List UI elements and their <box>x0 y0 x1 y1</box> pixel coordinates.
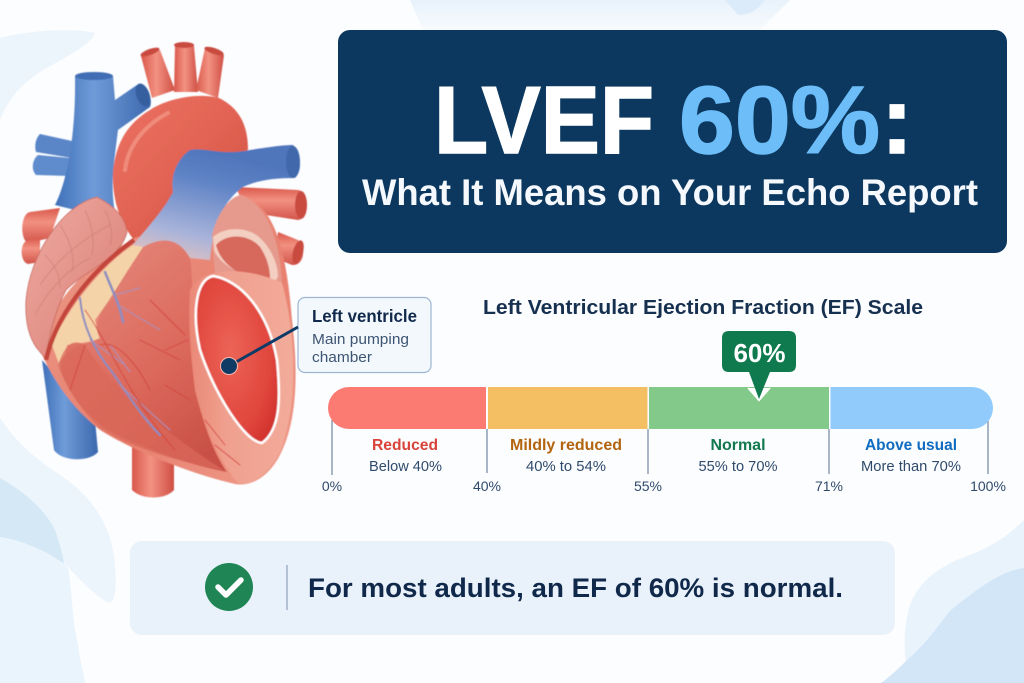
60 percent marker: 60% <box>733 338 786 368</box>
aortic arch <box>113 96 248 240</box>
left atrium <box>212 195 282 290</box>
lobe texture <box>35 210 112 315</box>
left red vessels <box>22 208 60 264</box>
descending aorta stub <box>132 445 174 498</box>
label: above usual: More than 70% <box>861 459 961 475</box>
segment: normal <box>649 387 829 429</box>
label: above usual: Above usual <box>865 437 957 454</box>
label: mildly reduced <box>510 437 622 475</box>
main title: LVEF <box>434 67 654 174</box>
coronary groove <box>46 240 134 360</box>
left ventricle callout <box>220 298 431 374</box>
label: above usual <box>861 437 961 475</box>
callout description: chamber <box>312 349 372 366</box>
label: mildly reduced: 40% to 54% <box>526 459 606 475</box>
main title <box>434 67 913 174</box>
title panel <box>338 30 1007 253</box>
label: normal <box>698 437 778 475</box>
axis tick labels <box>322 478 1006 494</box>
label: mildly reduced: Mildly reduced <box>510 437 622 454</box>
callout leader line and dot <box>220 327 298 374</box>
axis tick labels: 40% <box>473 478 501 494</box>
pulmonary trunk <box>133 145 300 260</box>
callout box <box>298 298 431 372</box>
left ventricle cavity <box>196 276 279 443</box>
takeaway panel <box>130 541 895 635</box>
axis tick labels: 100% <box>970 478 1006 494</box>
right atrium lobe <box>26 197 127 358</box>
segment: mildly reduced <box>488 387 648 429</box>
lower vena cava <box>42 360 98 459</box>
heart illustration <box>22 42 307 498</box>
subtitle: What It Means on Your Echo Report <box>362 172 978 213</box>
callout description: Main pumping <box>312 331 409 348</box>
callout title: Left ventricle <box>312 306 417 326</box>
axis tick labels: 55% <box>634 478 662 494</box>
EF scale bar <box>328 387 993 475</box>
label: reduced: Reduced <box>372 437 438 454</box>
left ventricle wall <box>189 271 293 484</box>
takeaway text: For most adults, an EF of 60% is normal. <box>308 573 843 603</box>
fat region <box>52 245 145 372</box>
segment: above usual <box>830 387 993 429</box>
aortic branches <box>140 42 224 98</box>
coronary vessels <box>70 272 240 465</box>
superior vena cava <box>33 72 153 238</box>
right red vessels <box>236 187 307 265</box>
segment: reduced <box>328 387 486 429</box>
range labels <box>369 437 961 475</box>
label: reduced: Below 40% <box>369 459 442 475</box>
heart body <box>40 202 296 485</box>
main title: 60% <box>679 67 880 174</box>
axis tick labels: 71% <box>815 478 843 494</box>
60 percent marker <box>722 331 796 400</box>
axis tick labels: 0% <box>322 478 342 494</box>
main muscle <box>60 240 227 472</box>
icon: check mark <box>205 563 253 611</box>
lower left dark muscle <box>58 342 225 471</box>
label: reduced <box>369 437 442 475</box>
label: normal: Normal <box>710 437 766 454</box>
label: normal: 55% to 70% <box>698 459 778 475</box>
main title: : <box>881 67 913 174</box>
scale title: Left Ventricular Ejection Fraction (EF) Scale <box>483 296 923 319</box>
tick lines <box>332 420 988 475</box>
